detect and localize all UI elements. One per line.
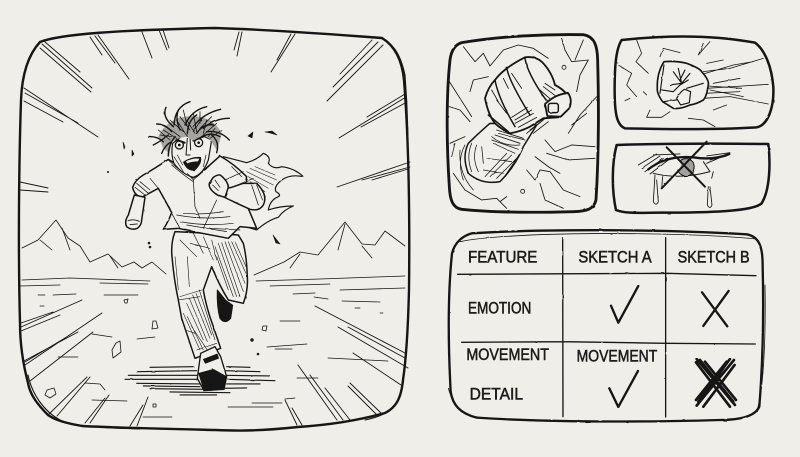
debris bbox=[107, 131, 280, 355]
fist bbox=[485, 57, 571, 133]
row: movement bbox=[466, 345, 657, 366]
panel frame bbox=[615, 37, 773, 129]
right fist bbox=[209, 175, 228, 197]
header row: SKETCH A bbox=[578, 247, 652, 266]
eye bbox=[638, 153, 730, 176]
face bbox=[172, 130, 212, 177]
trouser hatching bbox=[175, 233, 246, 350]
speed lines bbox=[20, 30, 410, 426]
header row: SKETCH B bbox=[678, 247, 750, 266]
heavy cross mark bbox=[696, 359, 736, 407]
check mark bbox=[609, 371, 638, 407]
hair bbox=[148, 102, 229, 156]
table frame bbox=[448, 230, 765, 422]
panel frame bbox=[613, 144, 769, 213]
row: emotion bbox=[468, 286, 729, 326]
cross bbox=[662, 142, 707, 188]
small fist bbox=[657, 61, 708, 109]
front shoe bbox=[197, 347, 227, 391]
lightning lines bbox=[447, 38, 597, 208]
row: movement: MOVEMENT bbox=[466, 345, 549, 364]
lightning and trails bbox=[618, 40, 768, 127]
row: movement: MOVEMENT bbox=[577, 347, 657, 366]
ground shadow bbox=[125, 367, 275, 395]
rear foot bbox=[217, 290, 233, 322]
panel: comparison table bbox=[448, 230, 765, 422]
wrist bbox=[465, 123, 537, 182]
panel frame bbox=[19, 28, 409, 431]
thumb bbox=[545, 93, 571, 117]
panel: fist with lightning bbox=[447, 35, 598, 212]
panel: running figure bbox=[19, 28, 410, 431]
header row: FEATURE bbox=[468, 247, 537, 266]
torn shirt tail bbox=[223, 153, 303, 230]
row: detail: DETAIL bbox=[470, 384, 523, 403]
eyes bbox=[173, 136, 205, 155]
table grid lines bbox=[458, 238, 756, 417]
check mark bbox=[611, 286, 638, 323]
mouth bbox=[183, 157, 201, 170]
panel frame bbox=[447, 35, 598, 212]
panel: crossed out eye bbox=[613, 142, 769, 213]
row: detail bbox=[470, 359, 736, 407]
raised forearm right bbox=[215, 183, 265, 210]
running character bbox=[125, 102, 303, 395]
tears bbox=[653, 172, 713, 207]
trousers bbox=[172, 232, 247, 358]
lowered arm left bbox=[126, 195, 145, 229]
shirt body bbox=[133, 156, 257, 238]
header row bbox=[468, 247, 750, 266]
cross mark bbox=[702, 291, 729, 326]
row: emotion: EMOTION bbox=[468, 298, 531, 317]
panel: punch with speed trails bbox=[615, 37, 773, 129]
mountains and ground bbox=[20, 220, 405, 417]
